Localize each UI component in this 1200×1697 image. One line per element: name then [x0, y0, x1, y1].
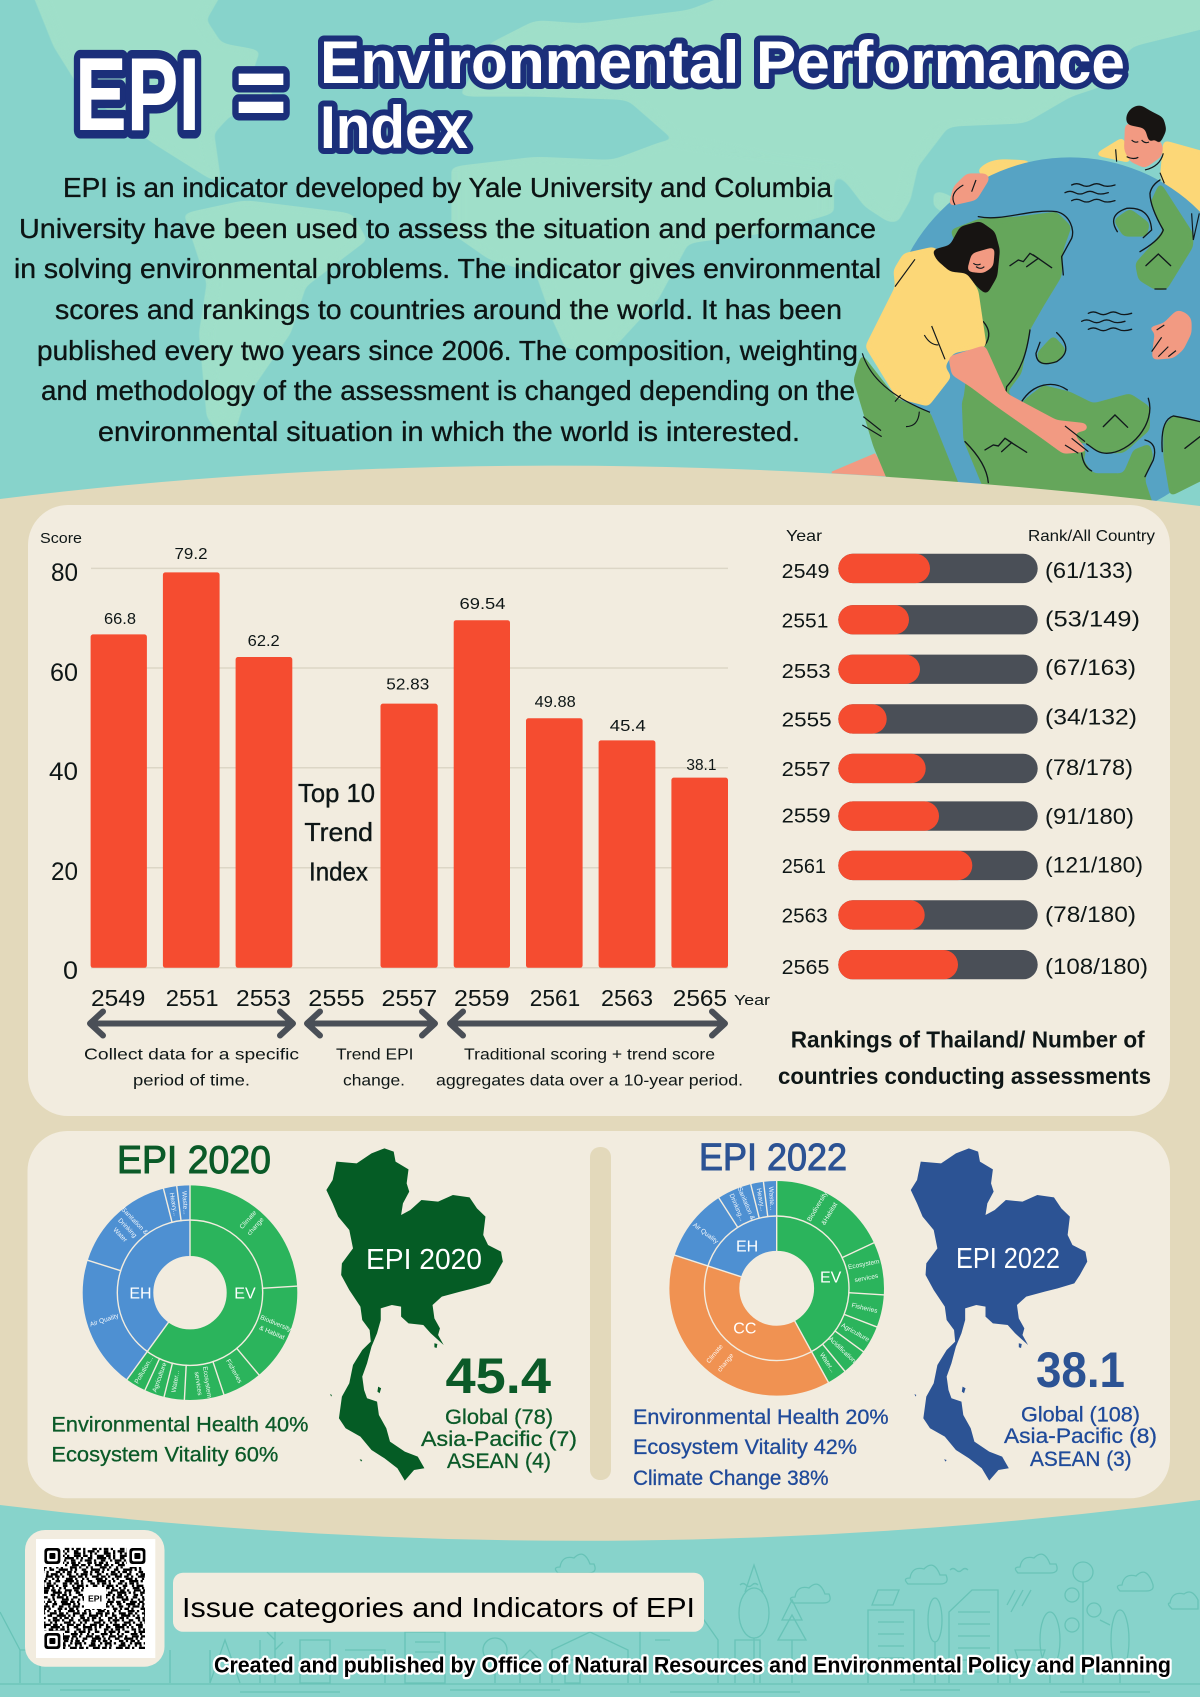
sunburst chart 2020: & Habitat	[258, 1324, 286, 1341]
sunburst chart 2020: Agriculture	[151, 1361, 169, 1393]
weights 2022: Environmental Health 20%	[633, 1406, 889, 1429]
sunburst chart 2022: Fisheries	[851, 1302, 879, 1315]
score 2020: 45.4	[446, 1348, 551, 1404]
rankings caption: countries conducting assessments	[778, 1063, 1151, 1089]
map label 2020: EPI 2020	[366, 1244, 482, 1276]
sunburst chart 2020: Air Quality	[89, 1312, 120, 1328]
weights 2022: Ecosystem Vitality 42%	[633, 1436, 857, 1459]
bar values: 66.8	[104, 611, 136, 628]
ranking values: (78/180)	[1045, 902, 1136, 927]
ranking years	[782, 561, 832, 979]
intro paragraph	[14, 172, 881, 447]
panel: score chart and rankings	[28, 505, 1170, 1116]
woman's shirt	[865, 247, 987, 407]
sunburst chart 2022: Agriculture	[840, 1322, 871, 1344]
man's head	[1124, 123, 1163, 168]
woman's line art	[862, 259, 1088, 453]
ranking track bars	[838, 554, 1038, 979]
ranking years: 2563	[782, 906, 828, 928]
weights 2020: Ecosystem Vitality 60%	[51, 1444, 278, 1467]
sunburst chart 2020: Drinking	[117, 1217, 139, 1239]
sunburst chart 2020: services	[193, 1371, 204, 1396]
ranking years: 2561	[782, 856, 826, 878]
sunburst chart 2020: Water	[112, 1226, 129, 1244]
sunburst chart 2022: EV	[820, 1270, 842, 1287]
QR code card: EPI	[88, 1594, 102, 1604]
weights 2020: Environmental Health 40%	[51, 1414, 308, 1437]
x axis years: 2553	[236, 985, 291, 1011]
ranks 2020: Asia-Pacific (7)	[421, 1428, 577, 1451]
y axis labels: 0	[63, 957, 78, 985]
x axis years: 2557	[382, 985, 437, 1011]
arrows: period ranges	[90, 1012, 725, 1036]
ranking values: (61/133)	[1045, 558, 1133, 583]
ranking years: 2555	[782, 710, 832, 732]
sunburst chart 2020: change	[246, 1216, 265, 1237]
inner ring	[114, 1217, 266, 1369]
skyline line art	[0, 1554, 1200, 1692]
bar values: 38.1	[686, 757, 716, 774]
sunburst chart 2020: Pollution...	[134, 1355, 155, 1385]
sunburst chart 2022: Acidification	[827, 1336, 857, 1365]
sunburst chart 2022: Biodiversity	[806, 1190, 829, 1223]
sunburst chart 2022: services	[854, 1272, 879, 1284]
ranks 2022: Asia-Pacific (8)	[1004, 1425, 1157, 1448]
title: Environmental Performance: Environmental Performance	[320, 29, 1125, 96]
sunburst chart 2022: change	[716, 1352, 735, 1373]
title: Index: Index	[320, 94, 468, 161]
x axis years: Year	[734, 992, 770, 1009]
x axis years: 2565	[673, 985, 727, 1011]
chart axis title: score: Score	[40, 530, 82, 547]
period captions: Collect data for a specific	[84, 1046, 299, 1064]
bar chart: EPI score by year	[40, 530, 770, 1011]
sunburst chart 2020: Fisheries	[224, 1358, 243, 1385]
bar values	[104, 546, 716, 774]
sunburst chart 2020: EV	[234, 1285, 256, 1302]
rankings column headers	[786, 528, 1155, 545]
ranks 2020: Global (78)	[445, 1406, 553, 1429]
x axis years	[91, 985, 770, 1011]
sunburst chart 2022: Sanitation &	[736, 1186, 756, 1222]
QR modules	[44, 1549, 145, 1648]
ranking values: (67/163)	[1045, 655, 1136, 680]
weights 2022	[633, 1406, 889, 1490]
period captions	[84, 1046, 743, 1090]
y axis labels: 80	[51, 559, 78, 587]
man's face lines	[1116, 140, 1199, 240]
ranking years: 2549	[782, 561, 829, 583]
bar values: 69.54	[460, 596, 506, 613]
y axis labels: 20	[51, 858, 78, 886]
ranking years: 2551	[782, 610, 828, 632]
ranking values: (78/178)	[1045, 755, 1133, 780]
bar values: 52.83	[386, 676, 429, 694]
weights 2022: Climate Change 38%	[633, 1467, 829, 1490]
heading: EPI 2022: EPI 2022	[699, 1137, 847, 1179]
sunburst chart 2022: Heavy...	[755, 1188, 766, 1212]
period captions: change.	[343, 1072, 405, 1090]
note: Top 10 Trend Index: Trend	[304, 817, 373, 847]
outer ring	[654, 1166, 899, 1411]
QR code card	[25, 1530, 164, 1667]
weights 2020	[51, 1414, 308, 1467]
intro paragraph: environmental situation in which the world is interested.	[98, 416, 800, 447]
sunburst chart 2020: Waste...	[180, 1191, 189, 1215]
link label: issue categories: Issue categories and Indicators of EPI	[182, 1592, 695, 1623]
sunburst chart 2022: Waste...	[767, 1186, 775, 1211]
woman's foot	[832, 453, 890, 477]
sunburst chart 2020: Heavy...	[168, 1192, 179, 1217]
ranking years: 2553	[782, 661, 831, 683]
intro paragraph: and methodology of the assessment is changed depending on the	[41, 375, 855, 406]
sunburst chart 2022: CC	[733, 1320, 756, 1337]
sunburst chart 2020	[64, 1167, 316, 1419]
QR finder patterns	[42, 1546, 148, 1652]
ranks 2022: Global (108)	[1021, 1404, 1140, 1427]
ranking values	[1045, 558, 1148, 979]
y axis labels	[49, 559, 78, 985]
x axis years: 2551	[166, 985, 219, 1011]
period captions: Traditional scoring + trend score	[464, 1046, 715, 1064]
y axis labels: 60	[50, 659, 78, 687]
sunburst chart 2020: Biodiversity	[259, 1314, 293, 1333]
EPI 2020 section	[51, 1139, 577, 1481]
ranking fill bars	[838, 554, 972, 979]
intro paragraph: published every two years since 2006. The composition, weighting	[37, 335, 858, 366]
inner ring	[703, 1214, 851, 1362]
outer ring	[64, 1167, 316, 1419]
period captions: period of time.	[133, 1072, 250, 1090]
QR centre logo	[84, 1587, 106, 1609]
x axis years: 2549	[91, 985, 145, 1011]
period captions: aggregates data over a 10-year period.	[436, 1072, 743, 1090]
bar values: 62.2	[248, 633, 280, 650]
map label 2022: EPI 2022	[956, 1243, 1060, 1275]
y axis labels: 40	[49, 758, 78, 786]
man's body	[1093, 137, 1200, 331]
ranks 2022: ASEAN (3)	[1030, 1448, 1132, 1471]
rankings caption: Rankings of Thailand/ Number of	[791, 1026, 1145, 1052]
score 2022: 38.1	[1036, 1342, 1125, 1398]
title: equals sign: =	[235, 35, 287, 151]
ranking years: 2557	[782, 759, 831, 781]
link label: issue categories	[173, 1573, 704, 1632]
ranks 2020: ASEAN (4)	[447, 1450, 551, 1473]
woman's shoulder behind globe	[977, 159, 1037, 180]
sunburst chart 2022: Drinking...	[728, 1193, 746, 1222]
divider	[590, 1147, 611, 1480]
ranks 2020	[421, 1406, 577, 1473]
intro paragraph: EPI is an indicator developed by Yale University and Columbia	[63, 172, 832, 203]
intro paragraph: University have been used to assess the situation and performance	[19, 213, 876, 244]
ranks 2022	[1004, 1404, 1157, 1471]
map of Thailand 2020	[326, 1148, 503, 1481]
rankings caption	[778, 1026, 1151, 1089]
x axis years: 2555	[308, 985, 364, 1011]
illustration: two people hugging the globe	[832, 105, 1200, 523]
intro paragraph: scores and rankings to countries around the world. It has been	[55, 294, 842, 325]
title: EPI: EPI	[75, 37, 200, 153]
sunburst chart 2022: Water...	[818, 1352, 836, 1374]
globe land	[950, 182, 1200, 510]
woman's hand on globe	[948, 173, 990, 207]
ranking values: (121/180)	[1045, 852, 1143, 878]
sunburst chart 2020: Climate	[238, 1209, 258, 1230]
sunburst chart 2020: Sanitation &	[120, 1206, 150, 1237]
rankings of Thailand	[778, 528, 1155, 1089]
ranking values: (108/180)	[1045, 954, 1148, 979]
x axis years: 2563	[601, 985, 653, 1011]
ranking values: (53/149)	[1045, 606, 1140, 632]
heading: EPI 2020: EPI 2020	[117, 1139, 271, 1182]
globe	[887, 157, 1200, 523]
bars	[91, 572, 728, 968]
woman's hair	[932, 221, 1000, 295]
sunburst chart 2020: Ecosystem	[201, 1366, 213, 1398]
note: Top 10 Trend Index: Top 10	[298, 778, 375, 808]
sunburst chart 2022: Air Quality	[691, 1222, 720, 1246]
map of Thailand 2022	[911, 1148, 1087, 1481]
bar values: 49.88	[535, 694, 576, 711]
x axis years: 2561	[530, 985, 580, 1011]
note: Top 10 Trend Index: Index	[309, 856, 368, 886]
sunburst chart 2022: EH	[736, 1239, 758, 1256]
intro paragraph: in solving environmental problems. The indicator gives environmental	[14, 253, 881, 284]
sunburst chart 2022: Climate	[705, 1343, 725, 1365]
EPI 2022 section	[633, 1137, 1157, 1490]
credit line: Created and published by Office of Natural Resources and Environmental Policy and Planning	[214, 1653, 1171, 1678]
period captions: Trend EPI	[336, 1046, 414, 1064]
note: Top 10 Trend Index	[298, 778, 375, 886]
sunburst chart 2022: &Habitat	[820, 1201, 839, 1226]
tan band	[0, 466, 1200, 1541]
woman's arm	[948, 345, 1088, 454]
ranking years: 2559	[782, 806, 831, 828]
x axis years: 2559	[454, 985, 510, 1011]
title	[75, 29, 1125, 161]
rankings column headers: Year	[786, 528, 823, 545]
globe line art	[965, 180, 1200, 483]
ranking values: (91/180)	[1045, 804, 1134, 829]
rankings column headers: Rank/All Country	[1028, 528, 1155, 545]
man's hand	[1145, 310, 1192, 360]
sunburst chart 2022	[654, 1166, 899, 1411]
bar values: 79.2	[174, 546, 208, 563]
sunburst chart 2020: Water...	[171, 1370, 181, 1393]
panel: EPI 2020 and 2022	[28, 1131, 1170, 1498]
sunburst chart 2022: Ecosystem	[847, 1258, 880, 1271]
sunburst chart 2020: EH	[129, 1285, 152, 1302]
ranking years: 2565	[782, 957, 829, 979]
woman's trousers	[853, 353, 960, 487]
ranking values: (34/132)	[1045, 704, 1137, 730]
bar values: 45.4	[610, 718, 646, 735]
